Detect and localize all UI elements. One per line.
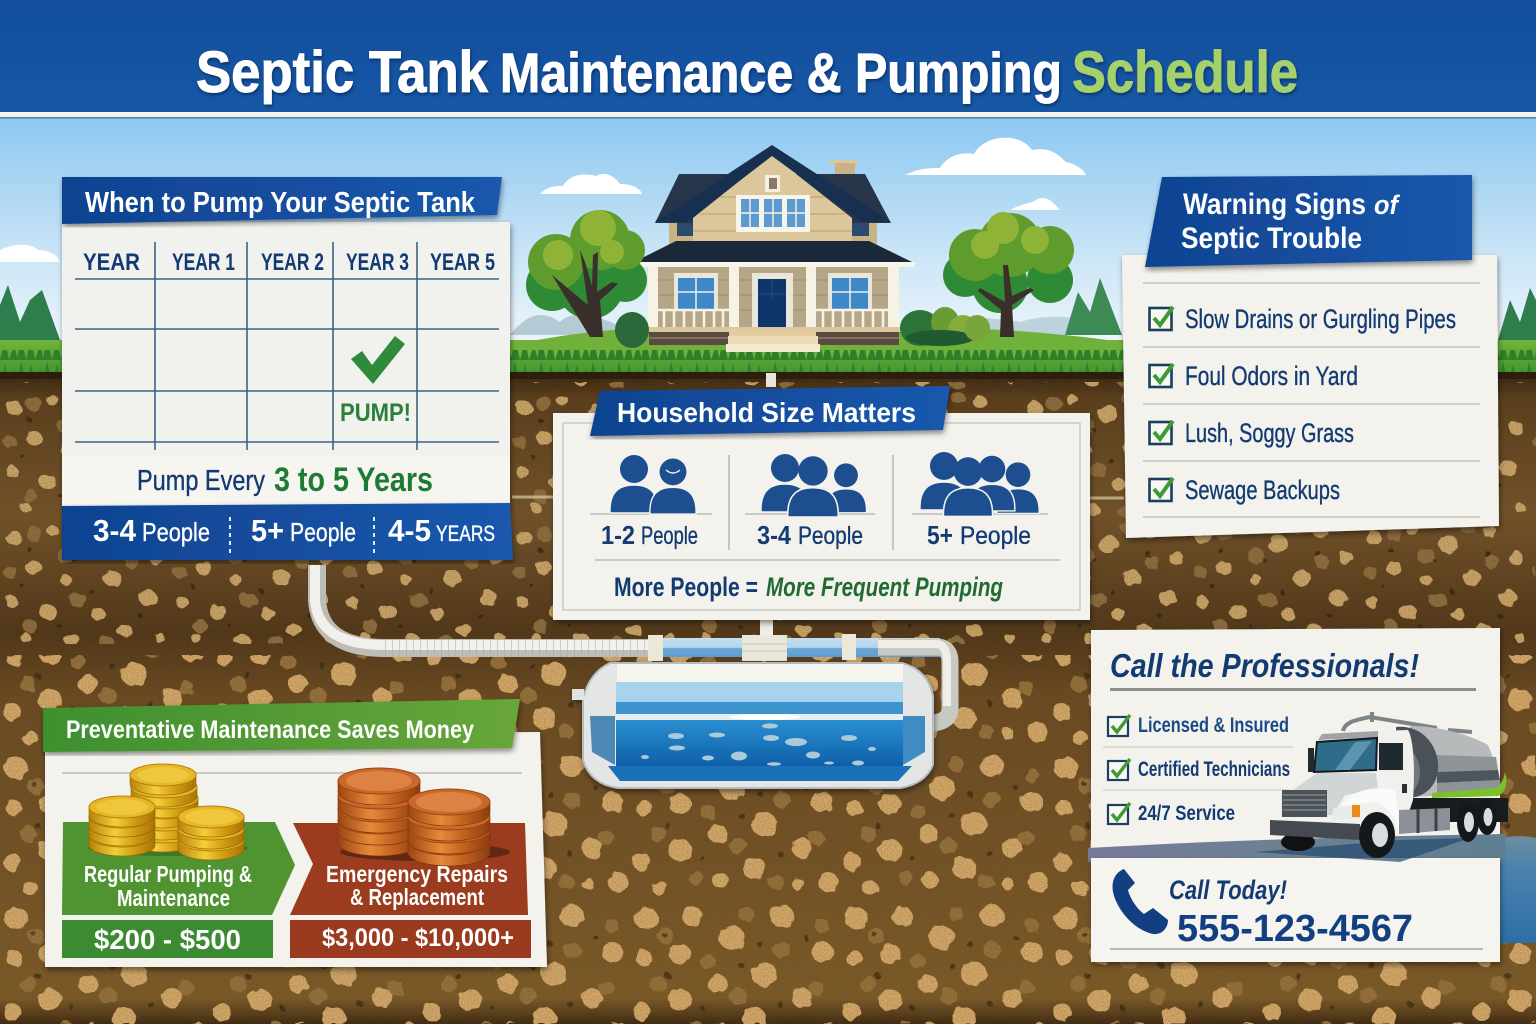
heading: warning signs (1145, 175, 1472, 267)
tree: left (526, 210, 647, 337)
household interval strip: 3-4 (93, 513, 137, 548)
connector lines beside household panel (512, 497, 1124, 498)
cost: emergency repairs: Emergency Repairs (326, 861, 508, 887)
household interval strip (62, 503, 513, 560)
cost: regular maintenance: Maintenance (117, 885, 230, 911)
household interval strip: YEARS (436, 521, 495, 546)
cloud: behind right tree (1010, 198, 1060, 210)
warning item: sewage backups: Sewage Backups (1185, 475, 1340, 505)
top pipes (1343, 712, 1472, 732)
heading: household size: Household Size Matters (617, 397, 916, 428)
wheels: rear (1457, 799, 1497, 842)
heading: call the professionals: Call the Professionals! (1110, 647, 1419, 684)
label: 5+ people: 5+ (927, 520, 953, 550)
icon: copper coins (338, 768, 510, 866)
inlet pipe and fittings (648, 620, 950, 723)
floating solids (641, 724, 876, 766)
title: Septic Tank (196, 40, 489, 105)
schedule grid (75, 242, 499, 450)
pump label: PUMP! (340, 399, 411, 427)
house (629, 145, 915, 352)
warning item: soggy grass: Lush, Soggy Grass (1185, 418, 1354, 448)
title: Maintenance & Pumping (500, 41, 1062, 104)
front door (752, 273, 793, 329)
soil background (0, 372, 1536, 1024)
heading: preventative maintenance: Preventative Maintenance Saves Money (66, 716, 474, 744)
more people note: More Frequent Pumping (766, 572, 1003, 602)
schedule grid: YEAR 2 (261, 249, 324, 276)
heading: when to pump (62, 177, 502, 224)
connector stub below house (766, 373, 776, 387)
distant hills and treeline (0, 278, 1536, 340)
porch windows (674, 273, 872, 309)
road (1088, 834, 1505, 862)
check item: 24/7 (1108, 802, 1235, 825)
schedule grid: YEAR (83, 249, 140, 276)
front wheels and bumper (1270, 808, 1450, 858)
cloud: top centre (540, 174, 642, 194)
panel: household size (553, 386, 1090, 620)
icon: 1-2 people (610, 455, 696, 514)
title (196, 40, 1298, 105)
schedule grid: YEAR 3 (346, 249, 409, 276)
label: 1-2 people: People (641, 522, 698, 550)
label: 3-4 people: 3-4 (757, 520, 791, 550)
label: 3-4 people (757, 520, 863, 550)
outlet pipe (315, 565, 650, 648)
check item: certified (1108, 758, 1290, 781)
shrubs (615, 307, 990, 348)
cost: regular maintenance (62, 822, 295, 958)
icon: gold coins (88, 764, 248, 860)
cost: emergency repairs: & Replacement (350, 884, 484, 910)
label: 1-2 people (601, 520, 698, 550)
cloud: far left (0, 245, 60, 262)
heading: warning signs: of (1374, 190, 1401, 220)
check item: licensed (1108, 714, 1289, 737)
cost: emergency repairs (290, 823, 531, 958)
cost: regular maintenance: $200 - $500 (94, 924, 241, 955)
label: 3-4 people: People (798, 522, 863, 550)
porch columns and railing (648, 267, 899, 329)
title: Schedule (1072, 40, 1298, 105)
household interval strip: 4-5 (388, 513, 431, 548)
panel: call the professionals (1088, 628, 1536, 962)
check item: 24/7: 24/7 Service (1138, 802, 1235, 825)
schedule grid: YEAR 1 (172, 249, 235, 276)
pump every note: Pump Every (137, 465, 265, 497)
upper windows (736, 195, 810, 232)
header band (0, 0, 1536, 118)
icon: phone (1113, 869, 1168, 934)
front steps (726, 329, 820, 352)
cab (1278, 730, 1414, 833)
heading: warning signs: Septic Trouble (1181, 222, 1362, 255)
pump every note: 3 to 5 Years (274, 461, 433, 499)
label: 1-2 people: 1-2 (601, 520, 635, 550)
label: 5+ people: People (960, 522, 1031, 550)
schedule grid: YEAR 5 (430, 249, 495, 276)
heading: household size (590, 386, 950, 436)
warning item: foul odors: Foul Odors in Yard (1185, 361, 1358, 391)
check item: certified: Certified Technicians (1138, 758, 1290, 781)
sky background (0, 112, 1536, 352)
more people note (614, 572, 1003, 602)
icon: 3-4 people (761, 454, 866, 517)
label: 5+ people (927, 520, 1031, 550)
more people note: More People = (614, 572, 758, 602)
check item: licensed: Licensed & Insured (1138, 714, 1289, 737)
panel: when to pump (62, 177, 513, 560)
heading: when to pump: When to Pump Your Septic Tank (85, 187, 476, 219)
household interval strip: People (290, 517, 356, 547)
panel: warning signs (1122, 175, 1499, 538)
tanker body (1396, 726, 1507, 798)
cost: regular maintenance: Regular Pumping & (84, 861, 252, 887)
cost: emergency repairs: $3,000 - $10,000+ (322, 924, 514, 952)
cloud: top right (905, 138, 1086, 175)
warning item: sewage backups (1150, 475, 1340, 505)
warning item: slow drains: Slow Drains or Gurgling Pipes (1185, 304, 1456, 334)
heading: preventative maintenance (43, 699, 520, 752)
septic tank (572, 663, 933, 788)
warning item: foul odors (1150, 361, 1358, 391)
panel: preventative maintenance (43, 699, 547, 967)
household interval strip: 5+ (251, 513, 284, 548)
call today: Call Today! (1169, 875, 1287, 905)
heading: warning signs: Warning Signs (1183, 188, 1366, 221)
truck (1255, 712, 1508, 862)
household interval strip: People (142, 517, 210, 547)
icon: 5+ people (920, 452, 1039, 516)
phone number: 555-123-4567 (1177, 908, 1413, 950)
pump every note (62, 456, 510, 504)
lawn (0, 327, 1536, 374)
warning item: soggy grass (1150, 418, 1354, 448)
tree: right (943, 212, 1074, 337)
icon: check mark (351, 336, 405, 384)
